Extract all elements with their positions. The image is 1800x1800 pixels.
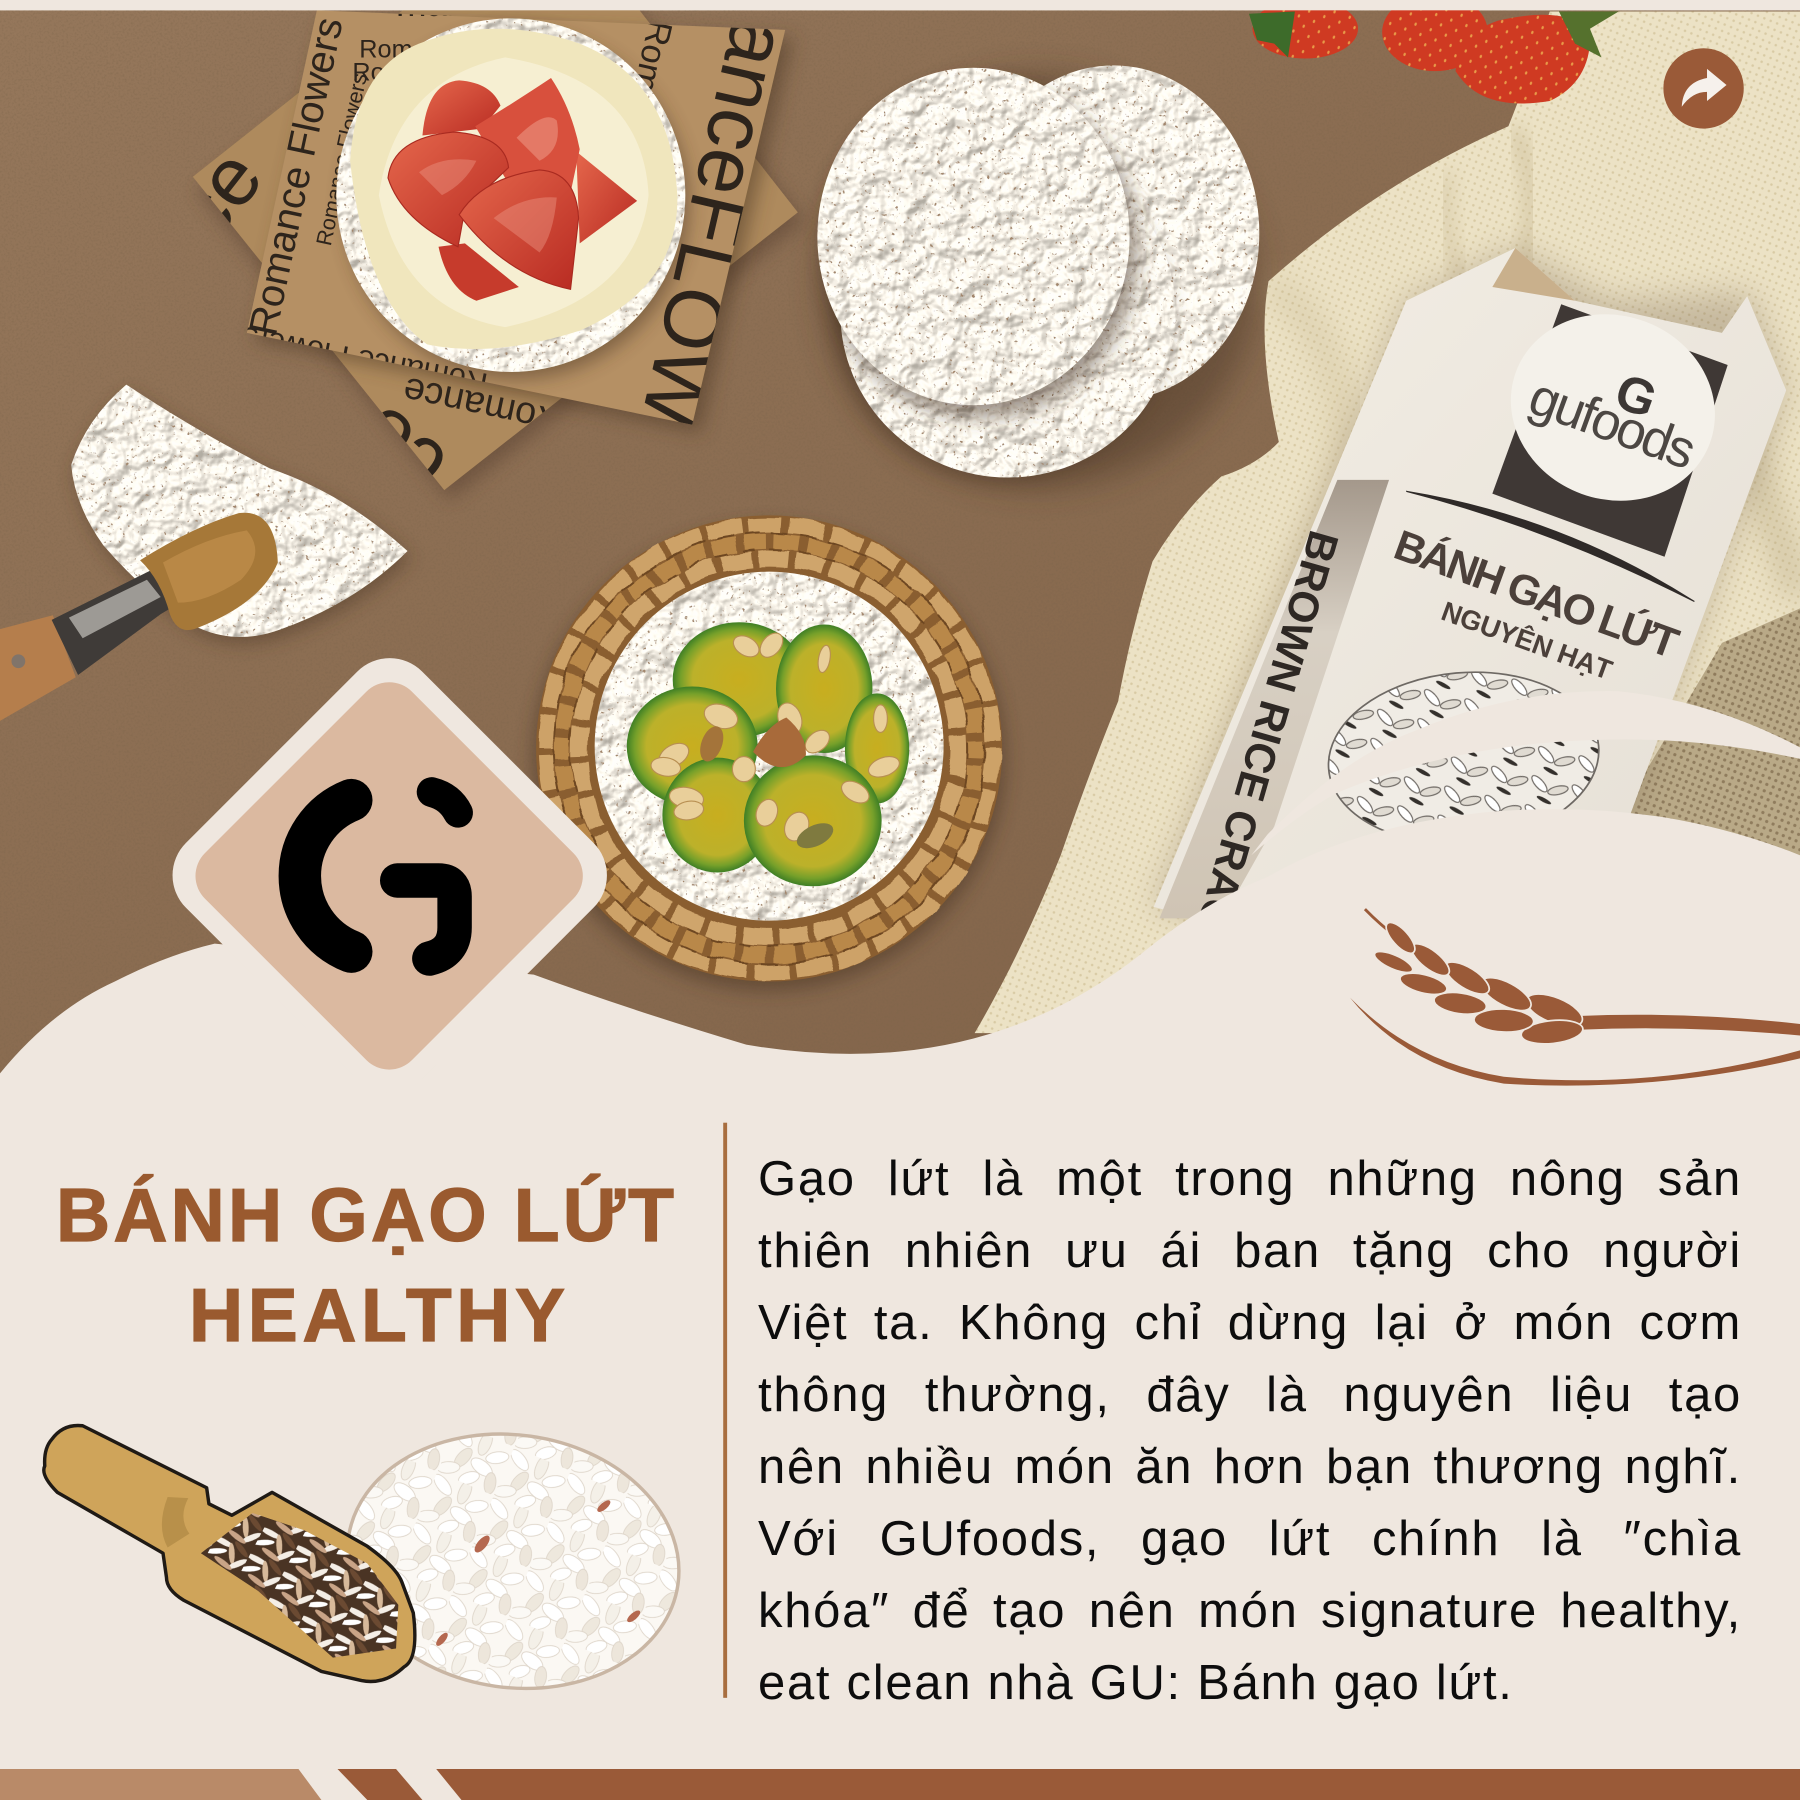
kraft paper napkins with printed text: Romance <box>399 368 567 443</box>
body paragraph: eat clean nhà GU: Bánh gạo lứt. <box>758 1656 1514 1710</box>
kraft paper napkins with printed text: ce <box>337 388 464 515</box>
kraft paper napkins with printed text: Ro <box>352 58 385 86</box>
body paragraph: thông thường, đây là nguyên liệu tạo <box>758 1368 1742 1422</box>
rice cake with cream and strawberry slices <box>336 18 689 379</box>
body paragraph: khóa″ để tạo nên món signature healthy, <box>758 1584 1742 1638</box>
logo diamond badge <box>154 639 626 1112</box>
body paragraph: thiên nhiên ưu ái ban tặng cho người <box>758 1224 1742 1278</box>
main cream wave panel <box>0 809 1800 1800</box>
body paragraph: nên nhiều món ăn hơn bạn thương nghĩ. <box>758 1440 1742 1494</box>
stack of plain rice cakes <box>817 65 1259 488</box>
woven basket with rice cake and cucumber slices <box>533 515 1006 991</box>
heading <box>56 1173 674 1357</box>
kraft paper napkins with printed text: Romance Flowers <box>311 71 372 248</box>
kraft paper napkins with printed text: Romance Flowers <box>240 13 352 339</box>
cream knit fabric <box>975 11 1800 1033</box>
share arrow button <box>1663 48 1744 129</box>
body paragraph <box>758 1152 1742 1710</box>
broken rice cake <box>71 385 411 644</box>
body paragraph: Gạo lứt là một trong những nông sản <box>758 1152 1742 1206</box>
product bag: G <box>1608 362 1664 429</box>
bottom stripe bar <box>0 1769 1800 1800</box>
product bag: NGUYÊN HẠT <box>1437 595 1617 686</box>
whole strawberries <box>1249 0 1619 104</box>
upper cream wave band <box>1251 691 1800 855</box>
illustration: rice cake <box>331 1413 696 1709</box>
product bag: gufoods <box>1522 367 1704 481</box>
knife with peanut butter <box>0 513 278 721</box>
product bag: BROWN RICE CRACKER <box>1164 526 1347 1022</box>
icon: wheat ear <box>1350 909 1800 1086</box>
illustration: wooden scoop with brown rice <box>44 1425 415 1682</box>
kraft paper napkins with printed text: Rom <box>359 35 413 63</box>
kraft paper napkins with printed text: Romance Flowers <box>239 320 490 402</box>
product bag <box>1154 248 1786 1022</box>
body paragraph: Việt ta. Không chỉ dừng lại ở món cơm <box>758 1296 1742 1350</box>
kraft paper napkins with printed text: ce <box>153 132 280 258</box>
vertical divider <box>723 1123 727 1698</box>
body paragraph: Với GUfoods, gạo lứt chính là ″chìa <box>758 1512 1742 1566</box>
photo background: brown board <box>0 10 1800 1158</box>
heading: HEALTHY <box>189 1273 565 1357</box>
top cream strip <box>0 0 1800 10</box>
heading: BÁNH GẠO LỨT <box>56 1173 674 1257</box>
product bag: BÁNH GẠO LỨT <box>1388 520 1685 667</box>
kraft paper napkins with printed text <box>193 10 804 499</box>
kraft paper napkins with printed text: Romance <box>609 17 679 169</box>
